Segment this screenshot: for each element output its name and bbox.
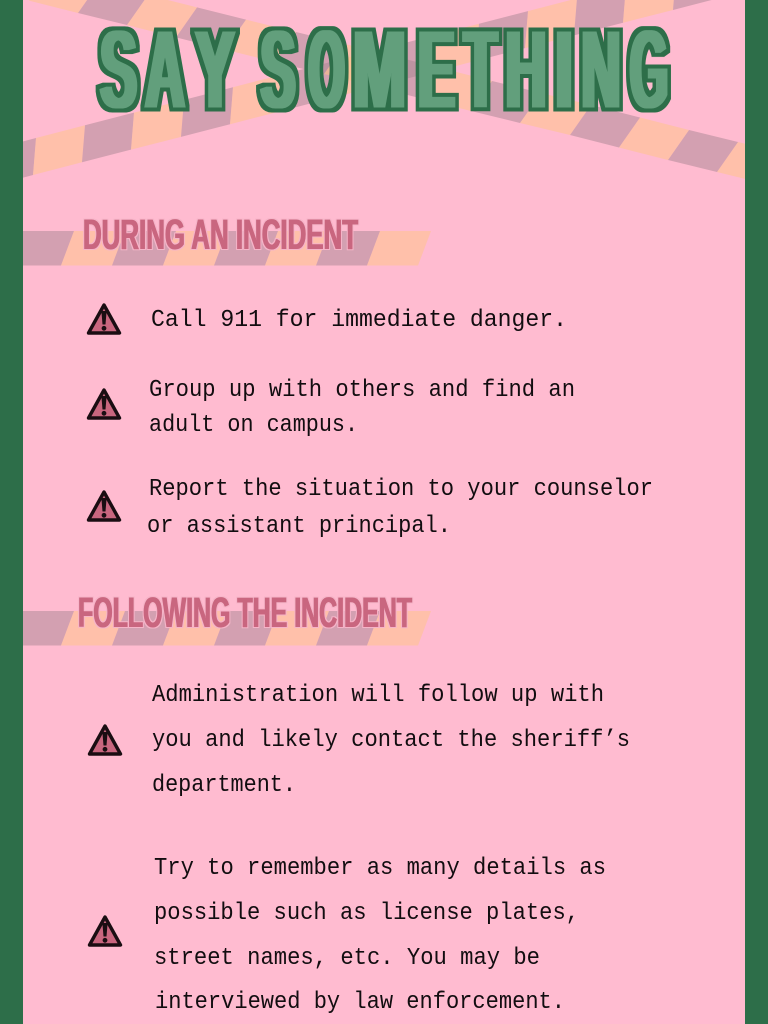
text: remember details: possible such as license plates, xyxy=(154,900,579,927)
text: remember details: interviewed by law enforcement. xyxy=(155,989,565,1016)
icon: warning triangle xyxy=(88,305,120,333)
text: group up xyxy=(149,377,575,439)
title: E xyxy=(418,6,455,132)
title: M xyxy=(353,6,406,132)
text: report the situation: or assistant principal. xyxy=(147,513,451,540)
section band: during an incident xyxy=(23,231,431,266)
title: A xyxy=(145,6,185,132)
title: S xyxy=(100,6,137,132)
text: call 911: Call 911 for immediate danger. xyxy=(151,307,567,334)
text: remember details: street names, etc. You may be xyxy=(154,945,540,972)
caution tape: rising left to right xyxy=(0,0,725,188)
section band: following the incident xyxy=(23,611,431,646)
title: I xyxy=(555,6,573,132)
left green border xyxy=(0,0,23,1024)
title xyxy=(100,6,668,132)
text: administration follow up: department. xyxy=(152,772,296,799)
text: administration follow up xyxy=(152,682,630,799)
text: administration follow up: you and likely contact the sheriff’s xyxy=(152,727,630,754)
caution tape: falling left to right xyxy=(29,0,768,184)
title: S xyxy=(260,6,296,132)
text: group up: adult on campus. xyxy=(149,412,358,439)
text: report the situation xyxy=(147,476,653,540)
text: administration follow up: Administration will follow up with xyxy=(152,682,604,709)
text: remember details xyxy=(154,855,606,1016)
title: T xyxy=(464,6,497,132)
title: N xyxy=(582,6,620,132)
title: Y xyxy=(195,6,235,132)
text: group up: Group up with others and find an xyxy=(149,377,575,404)
icon: warning triangle xyxy=(88,492,120,520)
heading: following the incident: FOLLOWING THE INCIDENT xyxy=(78,589,412,637)
text: report the situation: Report the situation to your counselor xyxy=(149,476,653,503)
infographic canvas: G xyxy=(630,6,668,132)
heading: during an incident: DURING AN INCIDENT xyxy=(83,211,358,259)
icon: warning triangle xyxy=(90,917,120,945)
title: H xyxy=(506,6,546,132)
title: O xyxy=(308,6,344,132)
icon: warning triangle xyxy=(90,726,120,754)
right green border xyxy=(745,0,768,1024)
icon: warning triangle xyxy=(88,390,120,418)
text: remember details: Try to remember as many details as xyxy=(154,855,606,882)
